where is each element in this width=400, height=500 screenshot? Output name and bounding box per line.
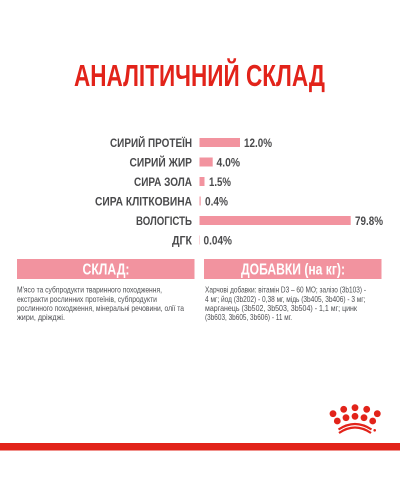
- heading: composition: [17, 259, 194, 279]
- text block: composition: екстракти рослинних протеїнів, субпродукти: [17, 295, 157, 304]
- row: crude protein: СИРИЙ ПРОТЕЇН: [110, 135, 192, 150]
- row: moisture: 79.8%: [355, 214, 383, 228]
- heading: additives: [204, 259, 382, 279]
- row: DHA: [172, 234, 232, 248]
- row: DHA: ДГК: [172, 234, 193, 248]
- bar chart: nutrients: [95, 135, 383, 248]
- row: moisture: [136, 214, 383, 228]
- row: crude fibre: СИРА КЛІТКОВИНА: [95, 194, 192, 208]
- text block: composition: жири, дріжджі.: [17, 313, 65, 322]
- panel: additives: [204, 259, 382, 322]
- row: crude ash: СИРА ЗОЛА: [134, 175, 192, 189]
- row: DHA: 0.04%: [204, 234, 232, 248]
- text block: composition: рослинного походження, мінеральні речовини, олії та: [17, 304, 184, 313]
- row: crude fat: [130, 154, 240, 170]
- row: moisture: ВОЛОГІСТЬ: [136, 214, 192, 228]
- heading: composition: СКЛАД:: [82, 262, 130, 278]
- text block: composition: [17, 286, 184, 322]
- row: crude fat: СИРИЙ ЖИР: [130, 154, 192, 170]
- text block: composition: М'ясо та субпродукти тваринного походження,: [17, 286, 162, 294]
- text block: additives: (3b603, 3b605, 3b606) - 11 мг.: [205, 313, 292, 322]
- panel: composition: [17, 259, 194, 322]
- heading: additives: ДОБАВКИ (на кг):: [241, 262, 345, 278]
- row: crude ash: 1.5%: [209, 175, 231, 189]
- row: crude protein: [110, 135, 272, 150]
- row: crude fat: 4.0%: [216, 156, 240, 170]
- icon: crown logo: [330, 404, 381, 433]
- text block: additives: [205, 286, 366, 322]
- row: crude protein: 12.0%: [244, 136, 272, 150]
- text block: additives: марганець (3b502, 3b503, 3b504) - 1,1 мг; цинк: [205, 304, 357, 313]
- row: crude fibre: 0.4%: [205, 194, 228, 208]
- footer band: [0, 443, 400, 450]
